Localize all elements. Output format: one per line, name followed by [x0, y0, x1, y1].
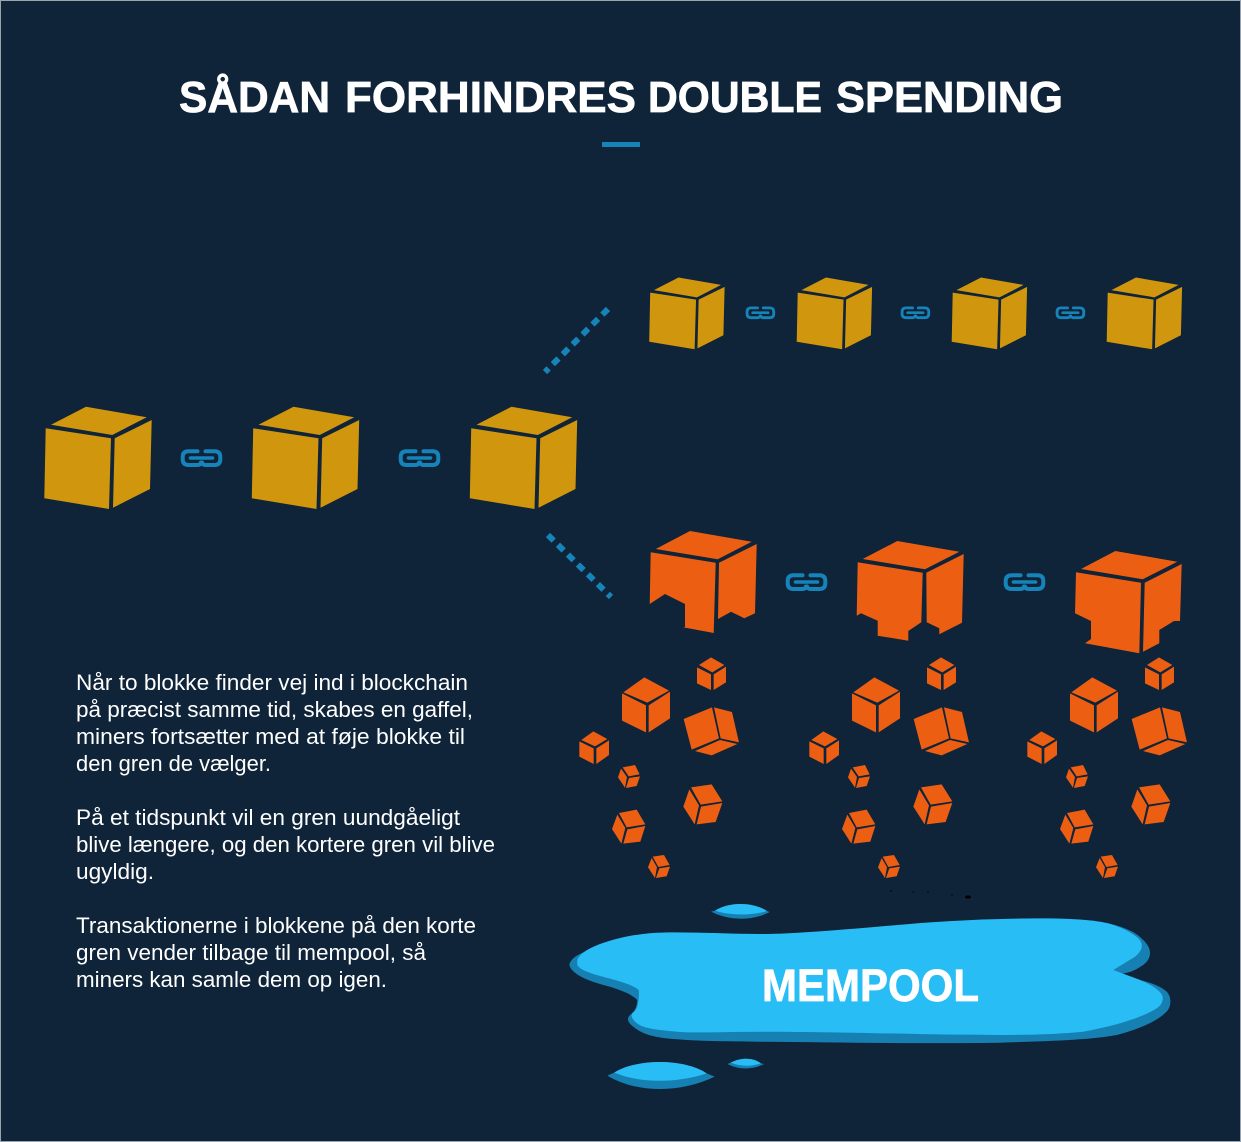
- explanatory text: ugyldig.: [76, 859, 154, 884]
- explanatory text: Transaktionerne i blokkene på den korte: [76, 913, 476, 938]
- title: [179, 73, 1063, 122]
- orange block 1: [650, 531, 757, 633]
- explanatory text: på præcist samme tid, skabes en gaffel,: [76, 697, 473, 722]
- droplet above puddle: [711, 904, 770, 919]
- explanatory text: gren vender tilbage til mempool, så: [76, 940, 426, 965]
- mempool label: MEMPOOL: [762, 960, 979, 1011]
- droplet lower middle: [728, 1059, 764, 1068]
- main chain links: [183, 451, 438, 465]
- explanatory text: miners fortsætter med at føje blokke til: [76, 724, 465, 749]
- explanatory text: miners kan samle dem op igen.: [76, 967, 387, 992]
- main chain: three gold blocks: [44, 407, 577, 509]
- orange block 3: [1075, 551, 1182, 653]
- lower branch links: [788, 575, 1043, 589]
- explanatory text: Når to blokke finder vej ind i blockchain: [76, 670, 468, 695]
- small dark specks above puddle: [890, 890, 971, 899]
- explanatory text: den gren de vælger.: [76, 751, 271, 776]
- lower branch: crumbling orange blocks: [650, 531, 1182, 653]
- upper branch: four gold blocks: [649, 277, 1182, 349]
- dotted fork line up: [545, 309, 608, 372]
- title: SÅDAN: [179, 73, 330, 122]
- mempool puddle: [569, 918, 1170, 1043]
- title accent bar: [602, 142, 640, 147]
- droplet lower left: [607, 1062, 715, 1089]
- dotted fork line down: [548, 535, 611, 597]
- falling cubes, middle cluster: [809, 657, 969, 878]
- explanatory text: [76, 670, 495, 992]
- title: DOUBLE: [648, 73, 822, 122]
- falling cubes, right cluster: [1027, 657, 1187, 878]
- title: SPENDING: [836, 73, 1063, 122]
- upper branch links: [747, 308, 1084, 318]
- title: FORHINDRES: [345, 73, 636, 122]
- explanatory text: På et tidspunkt vil en gren uundgåeligt: [76, 805, 461, 830]
- falling cubes, left cluster: [579, 657, 739, 878]
- orange block 2: [857, 541, 964, 641]
- explanatory text: blive længere, og den kortere gren vil blive: [76, 832, 495, 857]
